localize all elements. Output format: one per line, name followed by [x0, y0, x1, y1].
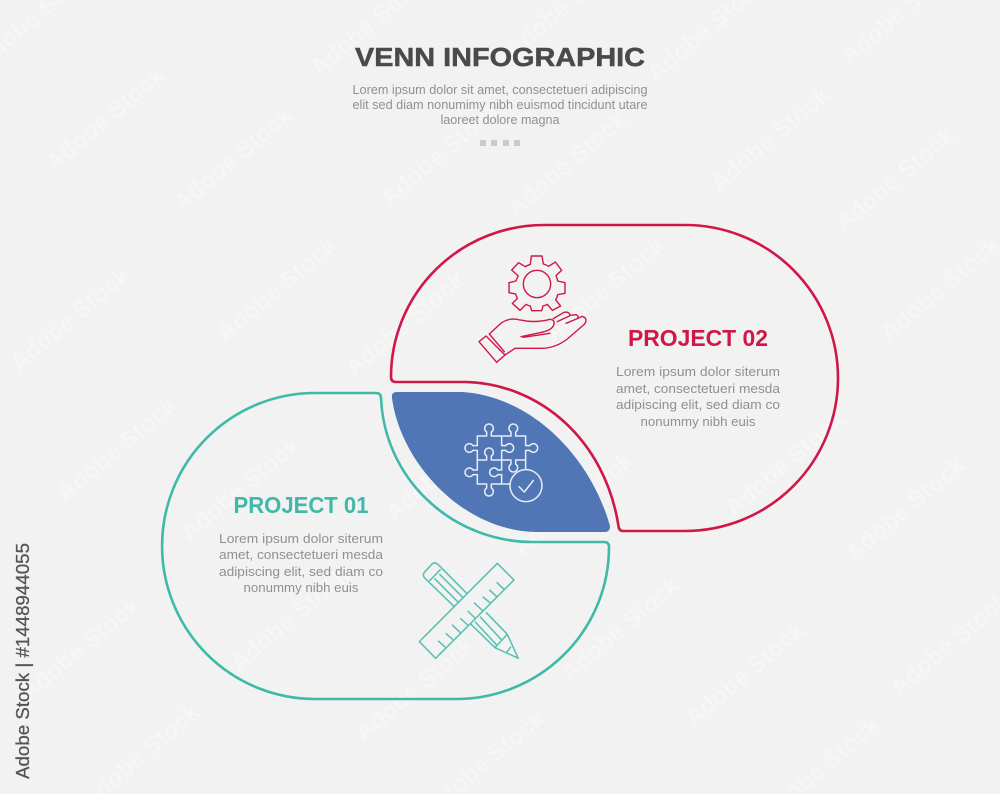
- watermark pattern: Adobe Stock: [680, 616, 811, 732]
- watermark pattern: Adobe Stock: [168, 101, 299, 217]
- divider dots: [480, 140, 520, 146]
- watermark pattern: Adobe Stock: [555, 571, 686, 687]
- text block: project 01: Lorem ipsum dolor siterum: [219, 532, 383, 546]
- hand: [479, 312, 586, 362]
- pencil upper part: [423, 563, 467, 607]
- watermark pattern: Adobe Stock: [375, 96, 506, 212]
- icon: gear in hand: [479, 256, 586, 362]
- text block: project 01: nonummy nibh euis: [244, 581, 358, 595]
- watermark pattern: Adobe Stock: [175, 431, 306, 547]
- watermark pattern: Adobe Stock: [508, 446, 639, 562]
- watermark pattern: Adobe Stock: [540, 231, 671, 347]
- watermark pattern: Adobe Stock: [720, 406, 851, 522]
- text block: project 01: amet, consectetueri mesda: [219, 548, 383, 562]
- subtitle text: elit sed diam nonumimy nibh euismod tincidunt utare: [352, 98, 648, 112]
- watermark pattern: Adobe Stock: [40, 61, 171, 177]
- watermark pattern: Adobe Stock: [830, 121, 961, 237]
- watermark pattern: Adobe Stock: [225, 561, 356, 677]
- watermark pattern: Adobe Stock: [840, 451, 971, 567]
- gear: [509, 256, 565, 311]
- pencil lower part: [471, 612, 507, 648]
- watermark pattern: Adobe Stock: [350, 631, 481, 747]
- watermark pattern: Adobe Stock: [340, 266, 471, 382]
- icon: ruler and pencil: [419, 563, 518, 658]
- stock id label: Adobe Stock | #1448944055: [13, 543, 33, 779]
- heading: project 02: PROJECT 02: [628, 325, 768, 351]
- subtitle text: laoreet dolore magna: [440, 113, 560, 127]
- panel: overlap: [392, 392, 610, 532]
- panel: project 01 outline: [162, 393, 609, 699]
- watermark pattern: Adobe Stock: [15, 591, 146, 707]
- panel: project 02 outline: [391, 225, 838, 531]
- text block: project 01: adipiscing elit, sed diam co: [219, 565, 383, 579]
- watermark pattern: Adobe Stock: [380, 411, 511, 527]
- text block: project 02: [616, 365, 780, 429]
- watermark pattern: Adobe Stock: [212, 231, 343, 347]
- heading: project 01: PROJECT 01: [234, 492, 369, 518]
- text block: project 02: adipiscing elit, sed diam co: [616, 398, 780, 412]
- icon: puzzle with check: [465, 424, 542, 502]
- ruler: [419, 563, 514, 658]
- watermark pattern: Adobe Stock: [5, 261, 136, 377]
- watermark pattern: Adobe Stock: [502, 106, 633, 222]
- watermark pattern: Adobe Stock: [52, 391, 183, 507]
- text block: project 02: nonummy nibh euis: [640, 415, 756, 429]
- subtitle text: Lorem ipsum dolor sit amet, consectetueri adipiscing: [352, 83, 648, 97]
- subtitle text: [352, 83, 648, 127]
- text block: project 01: [219, 532, 383, 595]
- watermark pattern: Adobe Stock: [705, 81, 836, 197]
- text block: project 02: amet, consectetueri mesda: [616, 382, 780, 396]
- text block: project 02: Lorem ipsum dolor siterum: [616, 365, 780, 379]
- title: VENN INFOGRAPHIC: [355, 42, 645, 72]
